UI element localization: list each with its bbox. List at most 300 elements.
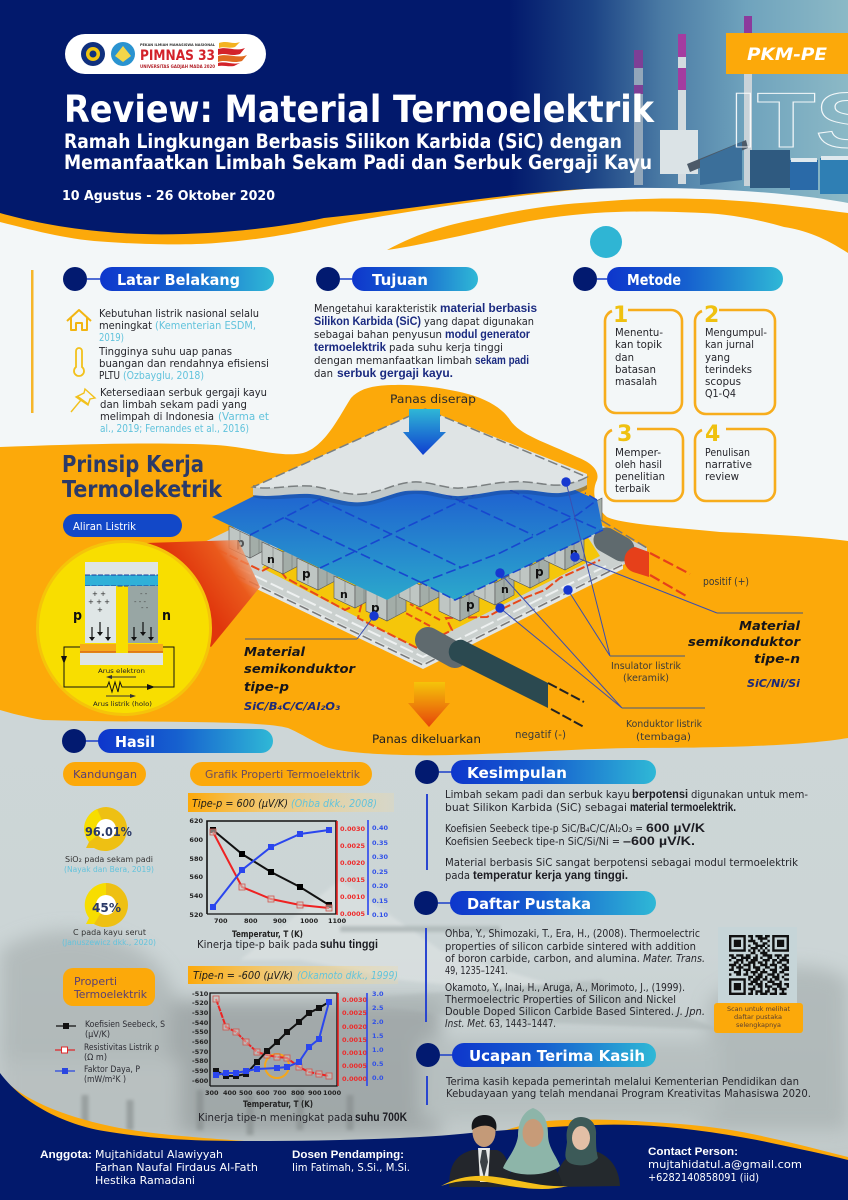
axis labels: [192, 990, 384, 1110]
chart title: tipe-n: Tipe-n = -600 (µV/k): [193, 970, 293, 982]
label pill: Aliran Listrik: [63, 514, 182, 537]
orange swoosh under header right: [387, 198, 848, 253]
label: positif: positif (+): [703, 576, 749, 588]
plot area: [207, 821, 336, 914]
label: Panas diserap: Panas diserap: [390, 392, 476, 406]
icon: PIMNAS flag: [218, 42, 247, 66]
panel: Daftar Pustaka: [414, 891, 803, 1033]
label: p-type material: SiC/B₄C/C/Al₂O₃: [244, 701, 340, 713]
pill: Properti Termoelektrik: Termoelektrik: [73, 989, 148, 1001]
label: Konduktor listrik: (tembaga): [636, 732, 691, 743]
text: Kebutuhan listrik: [99, 308, 259, 344]
stat: 45%: (Januszewicz dkk., 2020): [62, 938, 156, 947]
axis labels: 0.0020: [340, 859, 366, 867]
thermoelectric module diagram: [146, 392, 803, 746]
detail circle: p-n junction: [38, 542, 210, 714]
pill: Kandungan: Kandungan: [73, 769, 137, 781]
axis labels: 900: [273, 917, 287, 925]
axis labels: 800: [291, 1089, 305, 1097]
text: conclusions: –600 µV/K.: [623, 836, 695, 848]
series: Seebeck: [213, 999, 332, 1079]
heading: Prinsip Kerja Termoleketrik: Prinsip Kerja: [62, 452, 204, 478]
PIMNAS wordmark: UNIVERSITAS GADJAH MADA 2020: [140, 64, 215, 70]
label: n-type material: semikonduktor: [688, 634, 801, 649]
axis labels: 0.40: [372, 824, 389, 832]
step 2: kan jurnal: [705, 339, 754, 351]
axis labels: 0.0010: [340, 893, 366, 901]
highlight ring at 700K: [265, 1054, 289, 1078]
step 2: [695, 303, 775, 414]
supervisor: Iim Fatimah, S.Si., M.Si.: [292, 1162, 410, 1174]
stat: 96.01%: (Nayak dan Bera, 2019): [64, 865, 154, 874]
team photo: [441, 1108, 620, 1189]
text: references: Double Doped Silicon Carbide Based Sintered.: [445, 1006, 674, 1018]
step 1: [605, 303, 682, 413]
text: conclusions: buat Silikon Karbida (SiC) sebagai: [445, 802, 627, 814]
series: power factor: [210, 827, 332, 910]
text: Tujuan paragraph: Silikon Karbida (SiC): [314, 316, 421, 328]
supervisor: [292, 1149, 410, 1174]
text: Tingginya suhu: Tingginya suhu uap panas: [98, 346, 232, 358]
stat: 96.01%: [64, 807, 154, 874]
axis labels: 0.5: [372, 1060, 384, 1068]
axis labels: 2.0: [372, 1018, 384, 1026]
axis labels: -510: [192, 990, 209, 998]
text: Tujuan paragraph: dan: [314, 368, 333, 380]
axis labels: -530: [192, 1009, 209, 1017]
chart title: tipe-n: [188, 966, 398, 984]
team members: [40, 1149, 258, 1187]
axis labels: 580: [189, 855, 203, 863]
label: n-type material: tipe-n: [754, 651, 800, 666]
text: Tujuan paragraph: Mengetahui karakteristik: [314, 303, 438, 315]
thermoelement legs: n: [501, 583, 509, 596]
top ceramic plate: [253, 409, 587, 502]
contact person: [648, 1146, 802, 1184]
text: Tujuan paragraph: sebagai bahan penyusun: [314, 329, 442, 341]
bottom orange wave right: [500, 1120, 848, 1170]
text: conclusions: temperatur kerja yang tinggi.: [473, 870, 628, 882]
axis labels: 0.0025: [340, 842, 366, 850]
heading: Tujuan: [316, 267, 478, 291]
axis labels: Temperatur, T (K): [243, 1100, 313, 1110]
QR caption: [714, 1003, 803, 1033]
arrow: heat absorbed: [403, 409, 446, 455]
text: Kebutuhan listrik: (Kementerian ESDM,: [155, 320, 256, 332]
heading: Kesimpulan: Kesimpulan: [467, 764, 567, 782]
step 3: Memper-: [615, 447, 661, 459]
thermoelement legs: p: [236, 536, 245, 550]
text: conclusions: digunakan untuk mem-: [691, 789, 808, 801]
label pill: Aliran Listrik: Aliran Listrik: [73, 521, 137, 533]
heading: Metode: [573, 267, 783, 291]
label: n-type material: Material: [739, 618, 801, 633]
icon: Tut Wuri Handayani logo: [111, 42, 135, 66]
step 1: 1: [613, 303, 628, 328]
chart title: tipe-n: (Okamoto dkk., 1999): [297, 970, 398, 982]
text: references: Mater. Trans.: [643, 953, 705, 965]
icon: pin: [71, 389, 95, 412]
subtitle: Ramah Lingkungan Berbasis Silikon Karbida (SiC) dengan: [64, 130, 622, 153]
team members: Mujtahidatul Alawiyyah: [95, 1149, 223, 1161]
thermoelement legs: p: [466, 598, 475, 612]
text: Tingginya suhu: [98, 346, 269, 382]
text: references: properties of silicon carbide sintered with addition: [445, 941, 696, 953]
QR code: [718, 927, 797, 1003]
thermoelement legs: p: [371, 601, 380, 615]
axis labels: 600: [189, 836, 203, 844]
label: p-type material: semikonduktor: [244, 661, 356, 676]
footer background: [0, 1073, 848, 1200]
series: resistivity: [213, 996, 332, 1079]
chart legend: Resistivitas Listrik ρ: [84, 1043, 159, 1053]
chart caption: suhu tinggi: [320, 939, 378, 951]
text: Tingginya suhu: (Ozbayglu, 2018): [123, 370, 204, 382]
text: Tujuan paragraph: serbuk gergaji kayu.: [337, 368, 453, 380]
text: conclusions: 600 µV/K: [646, 823, 706, 835]
orange wave under header left: [0, 180, 585, 244]
team members: Hestika Ramadani: [95, 1175, 195, 1187]
QR caption: selengkapnya: [736, 1021, 781, 1029]
axis labels: 0.0025: [342, 1009, 368, 1017]
text: conclusions: [445, 789, 808, 882]
step 4: Penulisan: [705, 447, 750, 459]
QR caption: daftar pustaka: [734, 1013, 782, 1021]
label: p-type material: Material: [244, 644, 306, 659]
heading: Kesimpulan: [415, 760, 656, 784]
thermoelement legs: n: [570, 546, 578, 559]
contact person: Contact Person:: [648, 1146, 738, 1158]
subtitle: Memanfaatkan Limbah Sekam Padi dan Serbuk Gergaji Kayu: [64, 151, 652, 174]
date: 10 Agustus - 26 Oktober 2020: [62, 188, 275, 204]
heading: Latar Belakang: [63, 267, 274, 291]
icon: ITS logo: [81, 42, 105, 66]
panel: Metode: [573, 267, 783, 501]
axis labels: -540: [192, 1019, 209, 1027]
heading: Hasil: Hasil: [115, 733, 155, 751]
chart legend: Koefisien Seebeck, S: [85, 1020, 165, 1030]
axis labels: 0.0005: [340, 910, 366, 918]
step 1: kan topik: [615, 339, 663, 351]
team members: Farhan Naufal Firdaus Al-Fath: [95, 1162, 258, 1174]
icon: house: [67, 310, 91, 330]
bottom ceramic plate: [186, 436, 647, 669]
heading: Latar Belakang: Latar Belakang: [117, 271, 240, 289]
badge: PKM-PE: PKM-PE: [747, 45, 827, 65]
arrow: heat released: [408, 682, 450, 727]
chart title: tipe-p: (Ohba dkk., 2008): [291, 798, 377, 810]
bottom orange wave left: [10, 1085, 260, 1145]
text: Tujuan paragraph: termoelektrik: [314, 342, 387, 354]
detail circle: p-n junction: + +: [92, 590, 106, 598]
text: conclusions: Limbah sekam padi dan serbuk kayu: [445, 789, 630, 801]
heading: Ucapan Terima Kasih: [416, 1043, 656, 1067]
text: Tujuan paragraph: [314, 303, 537, 380]
pill: Grafik Properti Termoelektrik: Grafik Properti Termoelektrik: [205, 769, 361, 781]
step 3: penelitian: [615, 471, 665, 483]
conductor traces: [208, 545, 600, 648]
axis labels: -600: [192, 1077, 209, 1085]
outlined ITS lettering: ITS: [730, 76, 848, 164]
axis labels: 1100: [328, 917, 347, 925]
axis labels: -570: [192, 1048, 209, 1056]
axis labels: 600: [256, 1089, 270, 1097]
text: Ketersediaan: dan limbah sekam padi yang: [100, 399, 247, 411]
chart caption: Kinerja tipe-p baik pada: [197, 939, 318, 951]
text: acknowledgement: [445, 1076, 811, 1100]
text: acknowledgement: Terima kasih kepada pemerintah melalui Kementerian Pendidikan dan: [445, 1076, 799, 1088]
axis labels: 620: [189, 817, 203, 825]
pill: Properti Termoelektrik: [63, 968, 155, 1006]
step 2: 2: [704, 303, 719, 328]
text: references: 49, 1235–1241.: [445, 965, 508, 977]
detail circle: p-n junction: p: [73, 608, 82, 624]
stat: 96.01%: SiO₂ pada sekam padi: [65, 855, 153, 864]
label: n-type material: [688, 618, 801, 690]
text: references: J. Jpn.: [675, 1006, 705, 1018]
text: references: Okamoto, Y., Inai, H., Aruga, A., Morimoto, J., (1999).: [445, 982, 685, 994]
step 3: 3: [617, 422, 632, 447]
heading: Ucapan Terima Kasih: Ucapan Terima Kasih: [469, 1047, 645, 1065]
step 3: terbaik: [615, 483, 651, 495]
person: middle: [503, 1108, 563, 1187]
heading: Prinsip Kerja Termoleketrik: Termoleketrik: [62, 477, 223, 503]
axis labels: 1000: [323, 1089, 342, 1097]
panel: Latar Belakang: [31, 267, 274, 435]
thermoelement legs: [229, 498, 602, 621]
axis labels: 540: [189, 892, 203, 900]
stat: 45%: C pada kayu serut: [73, 928, 146, 937]
text: Tujuan paragraph: dengan memanfaatkan limbah: [314, 355, 472, 367]
axis labels: -520: [192, 999, 209, 1007]
step 4: [695, 422, 775, 501]
detail circle: p-n junction: n: [162, 608, 171, 624]
contact person: mujtahidatul.a@gmail.com: [648, 1159, 802, 1171]
axis labels: 0.20: [372, 882, 389, 890]
heading: Prinsip Kerja Termoleketrik: [62, 452, 223, 503]
step 4: review: [705, 471, 739, 483]
axis labels: 1.0: [372, 1046, 384, 1054]
step 1: dan: [615, 352, 634, 364]
axis labels: 0.0: [372, 1074, 384, 1082]
axis labels: -550: [192, 1028, 209, 1036]
detail circle: p-n junction: - -: [141, 604, 149, 612]
text: Kebutuhan listrik: 2019): [99, 332, 124, 344]
heading: Hasil: [62, 729, 273, 753]
step 2: scopus: [705, 376, 741, 388]
label: n-type material: SiC/Ni/Si: [747, 678, 800, 690]
team members: Anggota:: [40, 1149, 92, 1161]
text: Ketersediaan: (Varma et: [218, 411, 269, 423]
chart caption: [197, 939, 378, 951]
text: Tujuan paragraph: material berbasis: [440, 303, 537, 315]
axis labels: 300: [205, 1089, 219, 1097]
thermoelement legs: p: [535, 565, 544, 579]
logo pill: [65, 34, 266, 74]
icon: thermometer: [74, 348, 84, 376]
thermoelement legs: n: [267, 553, 275, 566]
text: references: Thermoelectric Properties of Silicon and Nickel: [444, 994, 676, 1006]
axis labels: Temperatur, T (K): [232, 930, 303, 940]
series: Seebeck: [210, 827, 332, 908]
text: Tingginya suhu: PLTU: [99, 370, 120, 382]
panel: Tujuan: [314, 267, 537, 380]
axis labels: 900: [308, 1089, 322, 1097]
axis labels: [189, 817, 389, 940]
axis labels: 500: [239, 1089, 253, 1097]
detail circle: p-n junction: +: [97, 606, 103, 614]
axis labels: 0.0000: [342, 1075, 368, 1083]
series: resistivity: [210, 829, 332, 911]
text: Tujuan paragraph: sekam padi: [475, 355, 529, 367]
stat: 45%: 45%: [92, 900, 121, 915]
text: references: [444, 928, 705, 1030]
text: Tujuan paragraph: modul generator: [445, 329, 530, 341]
axis labels: 0.0005: [342, 1062, 368, 1070]
series: power factor: [213, 999, 332, 1078]
axis labels: 0.0030: [340, 825, 366, 833]
axis labels: 0.0010: [342, 1049, 368, 1057]
decorative swoosh: [441, 1176, 568, 1189]
detail circle: p-n junction: Arus listrik (holo): [93, 700, 152, 708]
text: Ketersediaan: melimpah di Indonesia: [100, 411, 214, 423]
stat: 96.01%: 96.01%: [85, 824, 132, 839]
panel: Ucapan Terima Kasih: [416, 1043, 811, 1105]
axis labels: 0.0020: [342, 1023, 368, 1031]
header background: [0, 0, 848, 234]
negative cable: [428, 640, 584, 727]
stat: 45%: [62, 883, 156, 947]
step 3: [605, 422, 683, 501]
axis labels: 400: [223, 1089, 237, 1097]
title: Review: Material Termoelektrik: [64, 88, 655, 131]
axis labels: -590: [192, 1067, 209, 1075]
label: Insulator listrik: [611, 661, 681, 684]
step 1: Menentu-: [615, 327, 663, 339]
axis labels: 560: [189, 873, 203, 881]
axis labels: 700: [273, 1089, 287, 1097]
panel: Hasil: [0, 729, 848, 1200]
label: Panas dikeluarkan: Panas dikeluarkan: [372, 732, 481, 746]
text: Kebutuhan listrik: Kebutuhan listrik nasional selalu: [99, 308, 259, 320]
heading: Metode: Metode: [627, 271, 681, 289]
detail circle: p-n junction: Arus elektron: [98, 667, 145, 675]
axis labels: 0.30: [372, 853, 389, 861]
text: Ketersediaan: al., 2019; Fernandes et al., 2016): [100, 423, 249, 435]
detail circle: p-n junction: + + +: [88, 598, 110, 606]
text: conclusions: Koefisien Seebeck tipe-p SiC/B₄C/C/Al₂O₃ =: [445, 823, 643, 835]
axis labels: 520: [189, 911, 203, 919]
text: Tujuan paragraph: yang dapat digunakan: [424, 316, 534, 328]
person: right: [556, 1117, 620, 1187]
step 3: oleh hasil: [615, 459, 662, 471]
label: Konduktor listrik: Konduktor listrik: [626, 719, 702, 730]
axis labels: 0.25: [372, 868, 389, 876]
text: Tingginya suhu: buangan dan rendahnya efisiensi: [99, 358, 269, 370]
chart title: tipe-p: Tipe-p = 600 (µV/K): [192, 798, 288, 810]
label: Insulator listrik: (keramik): [623, 673, 669, 684]
chart legend: [55, 1020, 165, 1085]
axis labels: 0.0015: [340, 876, 366, 884]
chart legend: (mW/m²K ): [84, 1075, 126, 1085]
label: p-type material: [244, 644, 356, 713]
copper pads: [262, 510, 600, 648]
PIMNAS wordmark: [140, 43, 216, 70]
heading: Daftar Pustaka: [414, 891, 656, 915]
chart legend: (µV/K): [85, 1030, 110, 1040]
thermoelement legs: n: [340, 588, 348, 601]
big orange band: [0, 385, 848, 755]
person: left: [449, 1115, 512, 1187]
step 2: Q1-Q4: [705, 388, 736, 400]
panel: Kesimpulan: [415, 760, 808, 882]
supervisor: Dosen Pendamping:: [292, 1149, 404, 1161]
text: conclusions: pada: [445, 870, 470, 882]
chart legend: Faktor Daya, P: [84, 1065, 140, 1075]
chart: tipe-n: [188, 966, 408, 1124]
text: conclusions: berpotensi: [632, 789, 688, 801]
axis labels: -560: [192, 1038, 209, 1046]
axis labels: 0.35: [372, 839, 389, 847]
text: Tujuan paragraph: pada suhu kerja tinggi: [389, 342, 503, 354]
photographic grey lower section: [0, 700, 848, 1200]
heading: Tujuan: Tujuan: [372, 271, 428, 289]
text: references: of boron carbide, carbon, and alumina.: [445, 953, 640, 965]
text: conclusions: Koefisien Seebeck tipe-n SiC/Si/Ni =: [445, 836, 620, 848]
PIMNAS wordmark: PEKAN ILMIAH MAHASISWA NASIONAL: [140, 43, 216, 47]
text: Ketersediaan: Ketersediaan serbuk gergaji kayu: [100, 387, 267, 399]
axis labels: 0.0030: [342, 996, 368, 1004]
detail circle: p-n junction: - - -: [134, 598, 147, 606]
detail circle: p-n junction: - -: [140, 590, 148, 598]
plot area: [210, 993, 337, 1086]
step 2: yang: [705, 352, 730, 364]
axis labels: 0.10: [372, 911, 389, 919]
pill: Grafik Properti Termoelektrik: [190, 762, 372, 786]
axis labels: 0.0015: [342, 1036, 368, 1044]
label: Konduktor listrik: [626, 719, 702, 743]
leader lines and dots: [245, 477, 803, 708]
step 2: Mengumpul-: [705, 327, 767, 339]
step 1: batasan: [615, 364, 656, 376]
axis labels: 3.0: [372, 990, 384, 998]
axis labels: 800: [244, 917, 258, 925]
label: Insulator listrik: Insulator listrik: [611, 661, 681, 672]
chart title: tipe-p: [188, 793, 394, 812]
text: references: Ohba, Y., Shimozaki, T., Era, H., (2008). Thermoelectric: [445, 928, 700, 940]
axis labels: -580: [192, 1057, 209, 1065]
pill: Properti Termoelektrik: Properti: [74, 976, 117, 988]
QR caption: Scan untuk melihat: [727, 1005, 790, 1013]
text: Ketersediaan: [100, 387, 269, 435]
chart legend: (Ω m): [84, 1053, 107, 1063]
axis labels: 1.5: [372, 1032, 384, 1040]
label: p-type material: tipe-p: [244, 679, 289, 694]
contact person: +6282140858091 (iid): [648, 1172, 759, 1184]
cone to detail circle: [146, 540, 260, 647]
decorative teal circle: [590, 226, 622, 258]
chart caption: Kinerja tipe-n meningkat pada: [198, 1112, 353, 1124]
axis labels: 700: [214, 917, 228, 925]
badge: PKM-PE: [726, 33, 848, 74]
blue copper plate: [212, 470, 603, 600]
thermoelement legs: p: [302, 567, 311, 581]
text: Kebutuhan listrik: meningkat: [99, 320, 152, 332]
PIMNAS wordmark: PIMNAS 33: [140, 48, 215, 64]
text: acknowledgement: Kebudayaan yang telah mendanai Program Kreativitas Mahasiswa 2020.: [446, 1088, 811, 1100]
text: references: Inst. Met.: [445, 1018, 487, 1030]
subtitle: [64, 130, 652, 174]
